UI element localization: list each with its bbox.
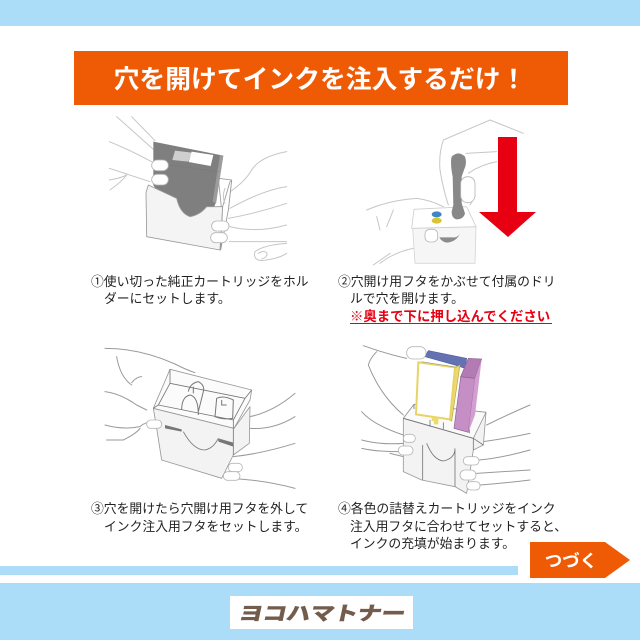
step 2 caption: ②穴開け用フタをかぶせて付属のドリ bbox=[338, 274, 556, 289]
step 3 caption: ③穴を開けたら穴開け用フタを外して bbox=[91, 501, 308, 516]
title banner bbox=[74, 51, 568, 105]
logo bbox=[230, 596, 413, 629]
top band bbox=[0, 0, 640, 26]
lower light blue strip bbox=[0, 566, 518, 575]
step 4 caption: 注入用フタに合わせてセットすると、 bbox=[350, 519, 567, 534]
step 3 caption: インク注入用フタをセットします。 bbox=[104, 519, 307, 534]
step 1 caption: ①使い切った純正カートリッジをホル bbox=[91, 274, 309, 289]
step 3 caption bbox=[91, 501, 308, 534]
red down arrow bbox=[479, 137, 536, 237]
step 1 caption bbox=[91, 274, 309, 306]
step 1 caption: ダーにセットします。 bbox=[104, 291, 231, 306]
step 2 warning: ※奥まで下に押し込んでください bbox=[350, 308, 550, 324]
panel: step 2 illustration bbox=[367, 120, 523, 265]
title banner: 穴を開けてインクを注入するだけ！ bbox=[114, 65, 526, 94]
panel: step 1 illustration bbox=[109, 117, 287, 261]
bottom band bbox=[0, 583, 640, 640]
panel: step 3 illustration bbox=[105, 348, 295, 488]
continue arrow bbox=[530, 542, 630, 578]
step 4 caption bbox=[338, 501, 567, 551]
step 4 caption: ④各色の詰替えカートリッジをインク bbox=[338, 501, 556, 516]
step 2 caption: ルで穴を開けます。 bbox=[350, 291, 464, 306]
logo: ヨコハマトナー bbox=[237, 604, 407, 625]
panel: step 4 illustration bbox=[362, 346, 530, 493]
step 4 caption: インクの充填が始まります。 bbox=[350, 536, 515, 551]
continue arrow: つづく bbox=[545, 551, 597, 571]
step 2 caption bbox=[338, 274, 556, 306]
